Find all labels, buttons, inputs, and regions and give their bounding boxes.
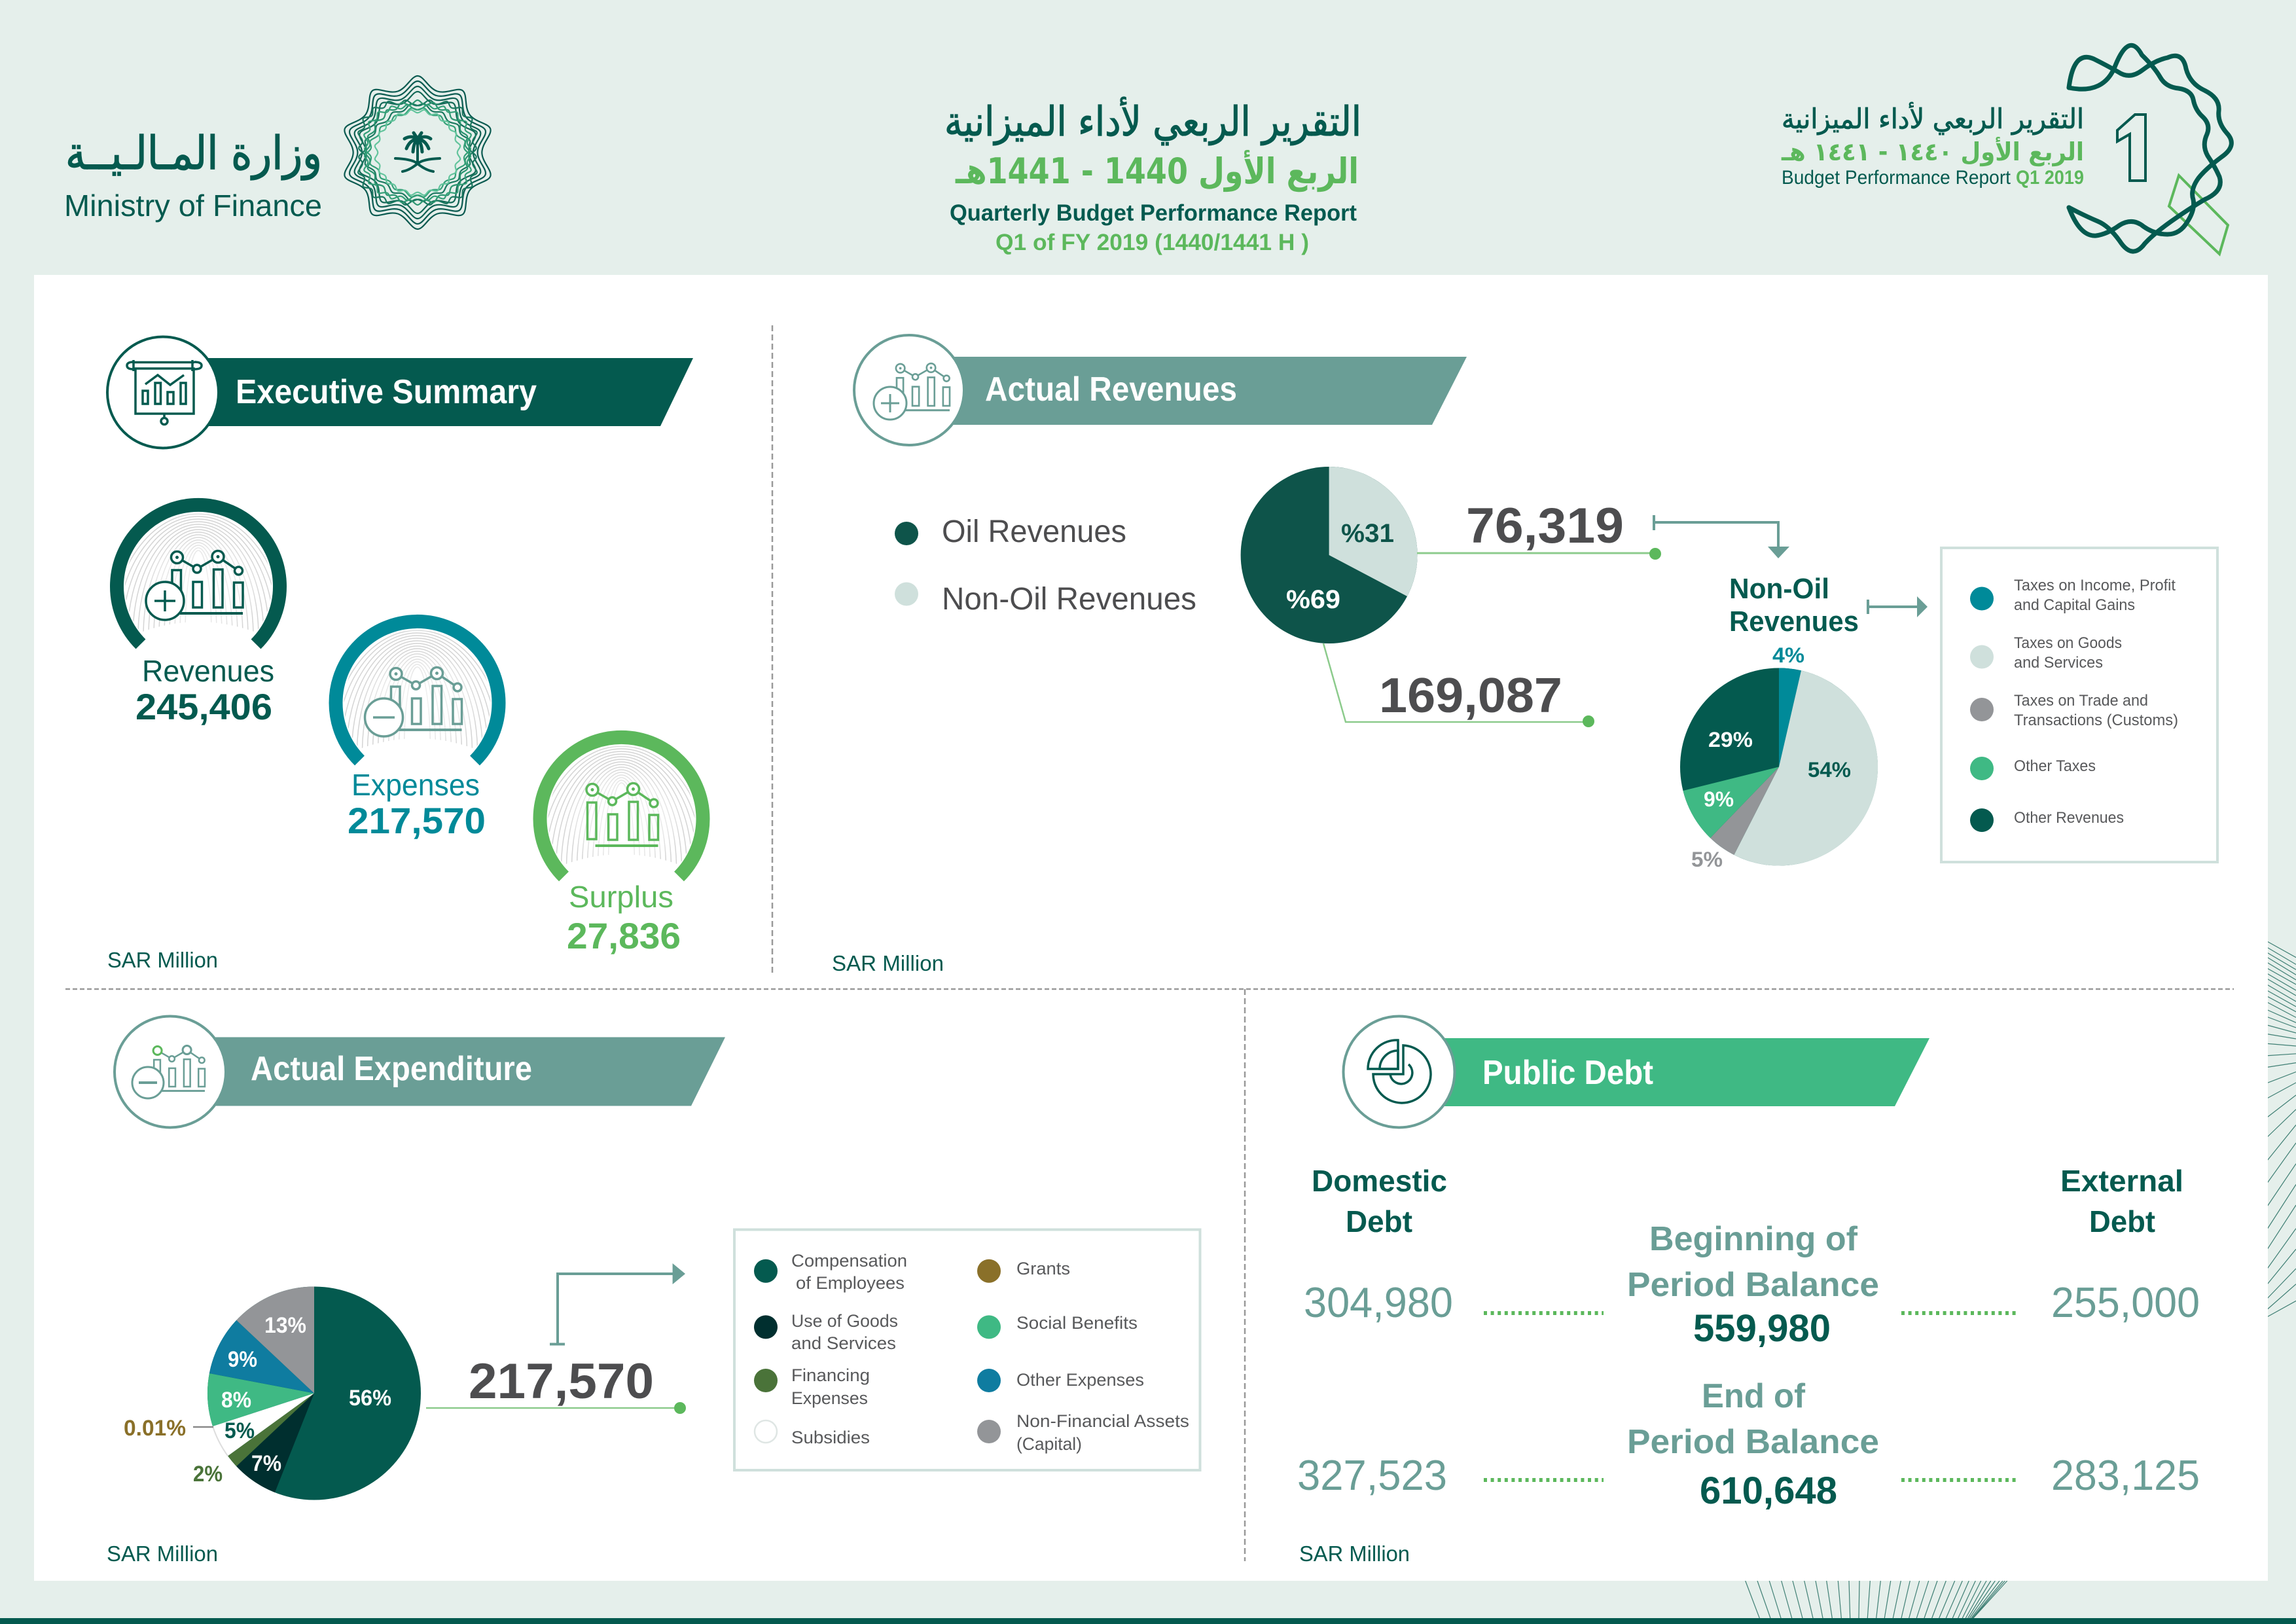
heading: external debt: Debt	[2089, 1204, 2155, 1238]
legend box: non-oil revenues: Taxes on Trade and	[2014, 692, 2148, 710]
pie chart: expenditure: 0.01%	[124, 1416, 186, 1441]
value: revenues: 245,406	[135, 686, 272, 727]
badge arabic subtitle: الربع الأول ١٤٤٠ - ١٤٤١ هـ	[1781, 136, 2084, 167]
arabic title: التقرير الربعي لأداء الميزانية	[944, 96, 1361, 145]
row: end of period	[1297, 1377, 2200, 1512]
vertical divider top	[772, 325, 773, 973]
panel: public debt	[1297, 1016, 2200, 1566]
connector: oil value	[1323, 643, 1594, 727]
unit note: SAR Million	[1299, 1542, 1410, 1566]
heading: non-oil revenues	[1729, 573, 1859, 638]
legend box: expenditure: Expenses	[791, 1388, 868, 1408]
legend box: expenditure: Other Expenses	[1016, 1370, 1144, 1390]
row: end of period: 327,523	[1297, 1451, 1447, 1499]
connector: expenditure value	[426, 1402, 686, 1414]
label: expenses: Expenses	[351, 768, 480, 802]
badge english line: Budget Performance Report	[1782, 167, 2011, 189]
label: surplus: Surplus	[569, 880, 673, 914]
value: total expenditure: 217,570	[469, 1354, 654, 1409]
pie chart: expenditure: 56%	[349, 1386, 391, 1411]
badge arabic title: التقرير الربعي لأداء الميزانية	[1782, 101, 2084, 135]
pie chart: expenditure: 2%	[193, 1462, 223, 1487]
value: oil revenues: 169,087	[1379, 668, 1562, 723]
icon: presentation board	[107, 336, 219, 448]
row: beginning of period: 559,980	[1693, 1307, 1831, 1350]
decorative right edge line fan	[2265, 940, 2296, 1318]
pie chart: expenditure: 8%	[221, 1388, 251, 1413]
row: beginning of period: 255,000	[2051, 1278, 2200, 1326]
legend box: expenditure: Compensation	[791, 1251, 907, 1271]
panel: actual revenues	[832, 335, 2217, 975]
bottom bar	[0, 1618, 2296, 1624]
banner: actual expenditure	[203, 1037, 725, 1106]
legend: non-oil revenues: Non-Oil Revenues	[942, 582, 1196, 617]
legend: oil revenues: Oil Revenues	[942, 514, 1126, 549]
logo: Ministry of Finance	[64, 76, 497, 229]
pie chart: non-oil breakdown: 54%	[1808, 758, 1851, 782]
banner: actual revenues	[942, 357, 1467, 425]
legend box: expenditure: Financing	[791, 1365, 870, 1385]
value: non-oil revenues: 76,319	[1466, 498, 1624, 554]
value: surplus: 27,836	[567, 915, 681, 956]
heading: non-oil revenues: Non-Oil	[1729, 573, 1829, 605]
legend box: expenditure: (Capital)	[1016, 1434, 1082, 1454]
row: end of period: End of	[1702, 1377, 1806, 1415]
row: beginning of period	[1304, 1220, 2200, 1350]
white content panel	[34, 275, 2268, 1581]
icon: wavy emblem	[338, 76, 497, 229]
pie chart: oil vs non-oil	[1241, 467, 1418, 643]
panel: executive summary	[107, 336, 713, 992]
arabic subtitle: الربع الأول 1440 - 1441هـ	[955, 150, 1359, 192]
heading: public debt: Public Debt	[1482, 1054, 1653, 1092]
pie chart: expenditure: 13%	[264, 1313, 306, 1338]
heading: non-oil revenues: Revenues	[1729, 605, 1859, 638]
english title: Quarterly Budget Performance Report	[950, 200, 1357, 226]
heading: domestic debt: Debt	[1346, 1204, 1412, 1238]
row: beginning of period: 304,980	[1304, 1278, 1453, 1326]
legend box: non-oil revenues: Transactions (Customs)	[2014, 712, 2178, 729]
logo arabic name: وزارة المـالـيــة	[65, 126, 322, 181]
pie chart: expenditure: 9%	[228, 1347, 257, 1372]
heading: domestic debt	[1312, 1164, 1447, 1238]
heading: external debt	[2060, 1164, 2183, 1238]
icon: braided ribbon	[2069, 45, 2231, 251]
pie chart: non-oil breakdown: 29%	[1708, 728, 1753, 751]
value: expenses: 217,570	[348, 800, 486, 841]
row: beginning of period: Beginning of	[1649, 1220, 1858, 1258]
heading: executive summary: Executive Summary	[236, 373, 537, 411]
legend box: non-oil revenues: and Capital Gains	[2014, 596, 2135, 614]
pie chart: non-oil breakdown	[1680, 643, 1878, 871]
unit note: SAR Million	[107, 1542, 218, 1566]
pie chart: expenditure: 5%	[224, 1418, 255, 1443]
legend box: non-oil revenues	[1941, 548, 2217, 862]
arrow: to expenditure legend	[550, 1263, 685, 1344]
heading: external debt: External	[2060, 1164, 2183, 1198]
decorative bottom edge line fan	[1746, 1581, 2007, 1618]
legend box: expenditure: Subsidies	[791, 1428, 870, 1447]
title block	[944, 96, 1361, 255]
legend box: non-oil revenues: Taxes on Goods	[2014, 634, 2122, 652]
arrow: to legend	[1868, 596, 1928, 617]
pie chart: expenditure: 7%	[251, 1451, 281, 1476]
vertical divider bottom	[1244, 989, 1246, 1561]
arrow: to non-oil breakdown	[1654, 515, 1789, 558]
legend box: non-oil revenues: Other Taxes	[2014, 757, 2096, 775]
row: beginning of period: Period Balance	[1627, 1266, 1879, 1304]
icon: palm and swords	[395, 133, 440, 171]
banner: executive summary	[196, 358, 693, 426]
pie chart: non-oil breakdown: 5%	[1691, 848, 1723, 871]
pie chart: non-oil breakdown: 4%	[1772, 643, 1804, 667]
badge green label: Q1 2019	[2016, 167, 2084, 189]
icon: revenues chart	[854, 335, 964, 445]
legend box: non-oil revenues: and Services	[2014, 654, 2103, 672]
pie chart: oil vs non-oil: %69	[1286, 585, 1340, 614]
connector: non-oil value	[1417, 548, 1661, 560]
icon: expenditure chart	[115, 1016, 226, 1127]
row: end of period: 610,648	[1700, 1470, 1837, 1512]
legend box: expenditure: Use of Goods	[791, 1311, 898, 1331]
legend box: expenditure: of Employees	[796, 1273, 905, 1293]
label: revenues: Revenues	[142, 654, 274, 688]
legend box: expenditure: Non-Financial Assets	[1016, 1411, 1189, 1431]
horizontal divider	[65, 988, 2234, 990]
pie chart: expenditure	[124, 1287, 421, 1500]
row: end of period: Period Balance	[1627, 1423, 1879, 1461]
legend box: non-oil revenues: Other Revenues	[2014, 809, 2124, 827]
logo english name: Ministry of Finance	[64, 189, 322, 223]
gauge: revenues	[107, 505, 290, 760]
icon: green polygon	[2169, 175, 2228, 254]
legend box: expenditure: Social Benefits	[1016, 1313, 1138, 1333]
panel: actual expenditure	[107, 1016, 1200, 1566]
heading: domestic debt: Domestic	[1312, 1164, 1447, 1198]
legend box: non-oil revenues: Taxes on Income, Profit	[2014, 577, 2176, 594]
outlined number 1	[2117, 115, 2145, 181]
english subtitle: Q1 of FY 2019 (1440/1441 H )	[996, 230, 1309, 255]
gauge: expenses	[326, 621, 509, 876]
unit note: SAR Million	[107, 948, 218, 972]
gauge: surplus	[530, 737, 713, 992]
legend box: expenditure: and Services	[791, 1333, 896, 1353]
report badge top right	[1781, 45, 2231, 254]
icon: debt pie	[1343, 1016, 1454, 1127]
banner: public debt	[1433, 1038, 1929, 1106]
unit note: SAR Million	[832, 951, 944, 975]
row: end of period: 283,125	[2051, 1451, 2200, 1499]
heading: actual revenues: Actual Revenues	[985, 370, 1237, 408]
pie chart: oil vs non-oil: %31	[1341, 519, 1394, 548]
heading: actual expenditure: Actual Expenditure	[251, 1050, 532, 1088]
legend box: expenditure: Grants	[1016, 1259, 1070, 1278]
legend box: expenditure	[734, 1229, 1200, 1470]
pie chart: non-oil breakdown: 9%	[1704, 787, 1734, 811]
